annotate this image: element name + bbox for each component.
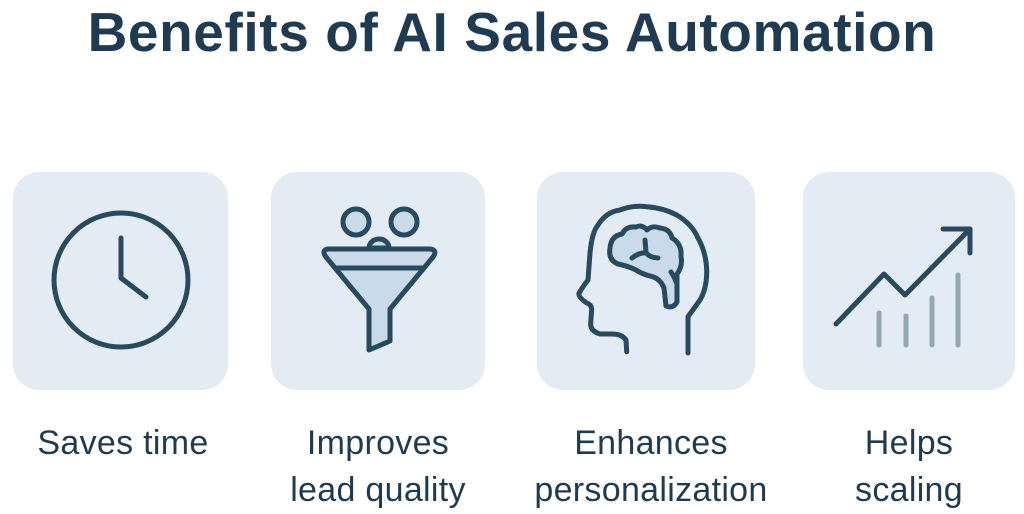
label: improves lead quality: lead quality [290, 471, 466, 509]
label: improves lead quality [290, 424, 466, 509]
label: enhances personalization [534, 424, 768, 509]
panel: personalization [537, 172, 755, 390]
icon: clock [54, 213, 188, 347]
panel: lead quality [271, 172, 485, 390]
panel: scaling [803, 172, 1015, 390]
label: helps scaling: scaling [855, 471, 963, 509]
icon: head with brain [579, 206, 707, 353]
title: Benefits of AI Sales Automation [88, 1, 936, 63]
panel: saves time [13, 172, 228, 390]
label: helps scaling: Helps [865, 424, 953, 462]
label: helps scaling [855, 424, 963, 509]
label: enhances personalization: Enhances [574, 424, 728, 462]
icon: growth chart [836, 229, 970, 345]
icon: funnel [324, 209, 435, 350]
label: improves lead quality: Improves [307, 424, 449, 462]
label: enhances personalization: personalization [534, 471, 768, 509]
label: saves time: Saves time [37, 424, 209, 462]
